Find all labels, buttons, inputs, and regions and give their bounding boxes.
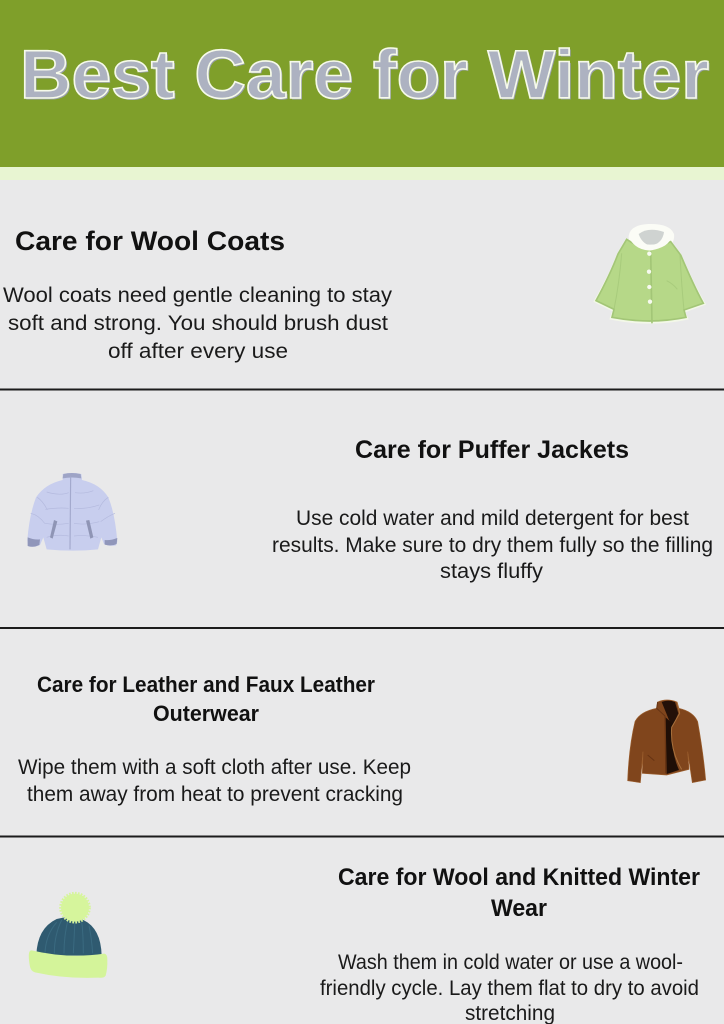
divider [0,836,724,838]
header banner [0,0,724,180]
heading: care for leather and faux leather outerwear: Care for Leather and Faux Leather [37,672,375,697]
divider [0,388,724,390]
heading: care for puffer jackets: Care for Puffer Jackets [355,436,629,464]
text: knitted wear advice: Wash them in cold water or use a wool- [338,951,683,974]
text: puffer jackets advice [272,507,713,583]
text: puffer jackets advice: Use cold water and mild detergent for best [296,507,689,530]
heading: care for wool and knitted winter wear [338,864,700,922]
title: Best Care for Winter [22,38,710,114]
text: wool coats advice: off after every use [108,340,288,363]
icon: knitted beanie [29,893,107,978]
panel: puffer jackets [0,391,724,627]
heading: care for wool and knitted winter wear: Care for Wool and Knitted Winter [338,864,700,891]
text: leather advice: Wipe them with a soft cloth after use. Keep [18,756,411,779]
text: wool coats advice: Wool coats need gentle cleaning to stay [3,284,393,307]
title: Best Care for Winter [20,36,709,113]
divider [0,627,724,629]
text: puffer jackets advice: results. Make sure to dry them fully so the filling [272,534,713,557]
text: leather advice: them away from heat to prevent cracking [27,783,403,806]
icon: brown leather jacket [628,700,706,783]
text: knitted wear advice [320,951,699,1024]
panel: wool coats [0,180,724,389]
text: leather advice [18,756,411,806]
heading: care for leather and faux leather outerwear [37,672,375,726]
heading: care for wool and knitted winter wear: Wear [491,895,547,922]
icon: green wool coat [595,224,705,323]
text: wool coats advice: soft and strong. You should brush dust [8,312,388,335]
panel: leather outerwear [0,629,724,836]
heading: care for wool coats: Care for Wool Coats [15,226,285,256]
text: puffer jackets advice: stays fluffy [440,560,544,583]
text: wool coats advice [3,284,393,363]
panel: wool and knitted wear [0,838,724,1024]
icon: lilac puffer jacket [27,473,117,551]
heading: care for leather and faux leather outerwear: Outerwear [153,701,259,726]
text: knitted wear advice: friendly cycle. Lay them flat to dry to avoid [320,977,699,1000]
